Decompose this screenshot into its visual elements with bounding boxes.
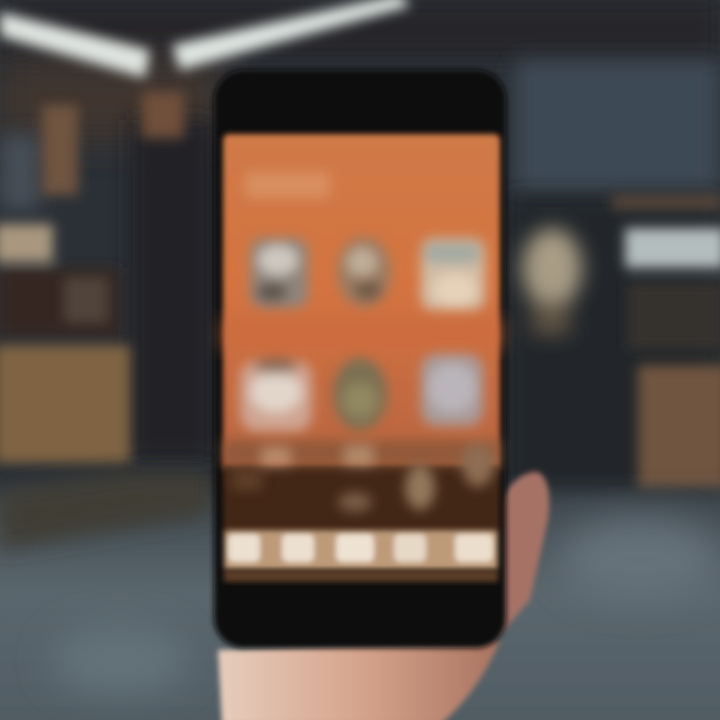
app tile 3	[421, 238, 485, 310]
bottom menu strip	[224, 530, 498, 570]
left wooden counter	[0, 345, 130, 463]
hand: finger behind phone	[495, 472, 549, 640]
right wooden counter	[638, 365, 720, 490]
brown panel highlights	[223, 440, 500, 512]
floor	[0, 472, 720, 720]
phone screen: orange app area	[223, 134, 500, 470]
phone body	[214, 70, 506, 648]
strip shadow	[224, 570, 498, 582]
right wall lit sign	[612, 195, 720, 350]
app tile 2	[337, 237, 391, 307]
ceiling lights	[0, 0, 410, 78]
hand: palm at bottom	[218, 640, 500, 720]
app shading bands	[226, 320, 498, 348]
right lit display item	[522, 228, 582, 335]
app tile 1	[250, 238, 308, 308]
app tile 4	[240, 358, 312, 432]
left shelf display	[0, 224, 120, 336]
app header	[245, 172, 330, 198]
app tile 6	[421, 354, 483, 426]
dark brown lower panel	[223, 465, 500, 533]
app tile 5	[333, 358, 387, 430]
ceiling beams: wood	[42, 92, 184, 195]
